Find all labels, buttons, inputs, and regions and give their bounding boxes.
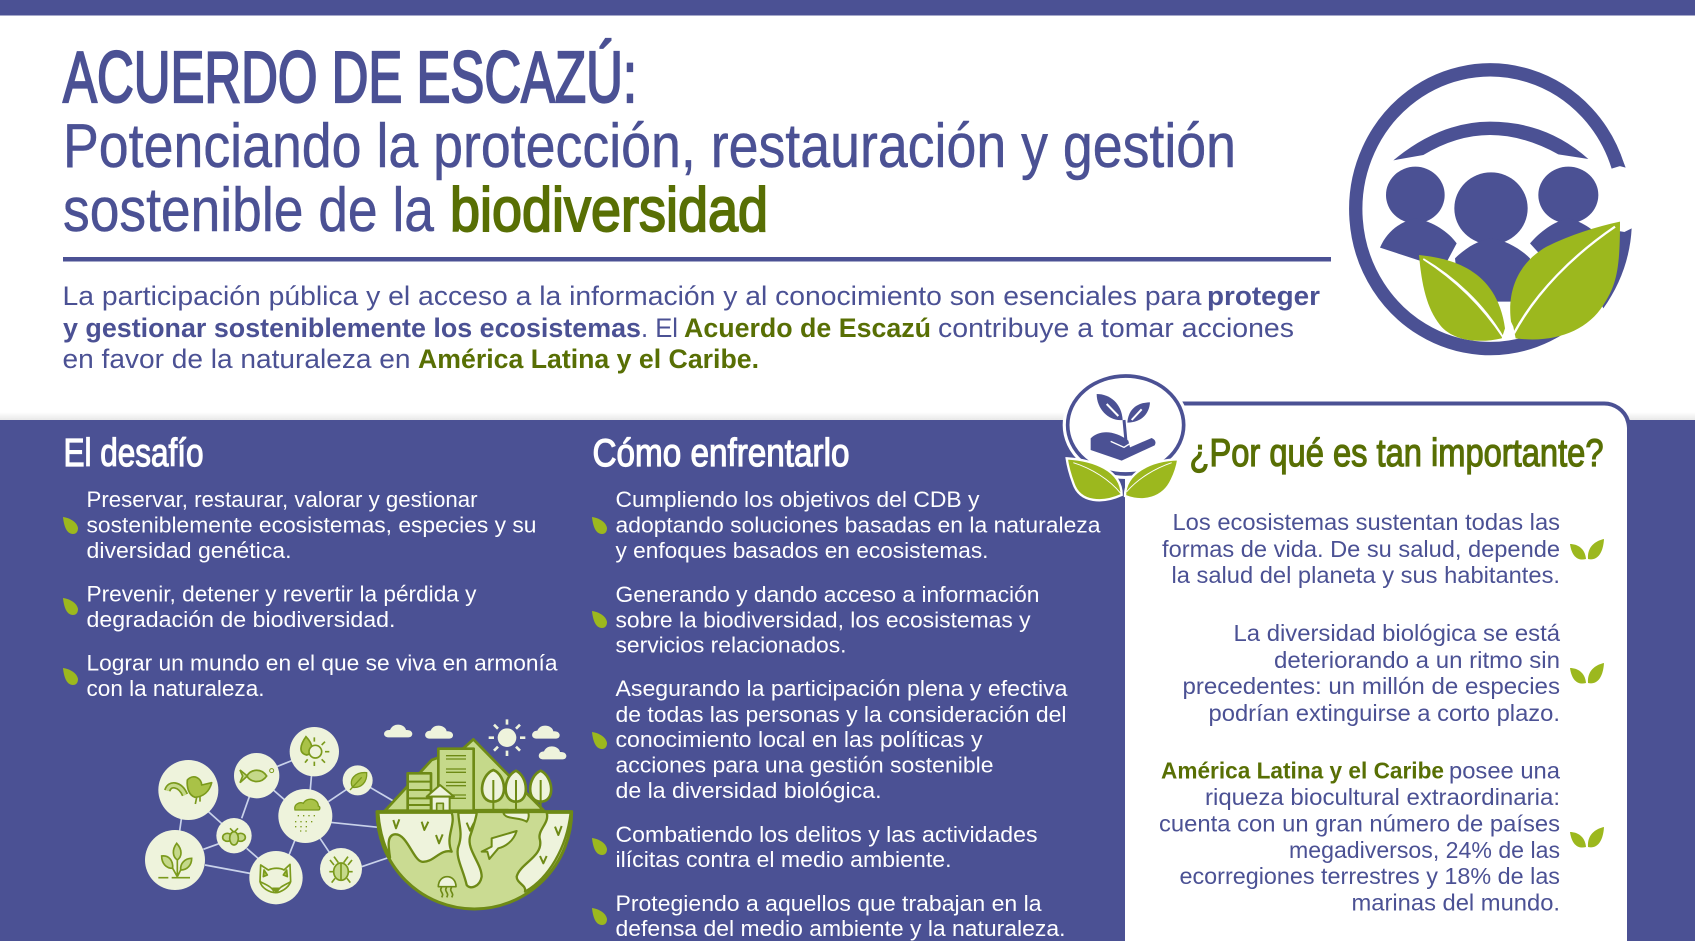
intro paragraph <box>62 281 1320 374</box>
list: cómo enfrentarlo items: Generando y dando acceso a información <box>616 582 1040 607</box>
list: desafío items: Prevenir, detener y revertir la pérdida y <box>86 582 476 606</box>
heading: El desafío: El desafío <box>64 432 204 475</box>
list: desafío items: diversidad genética. <box>86 538 292 563</box>
list: desafío items: sosteniblemente ecosistemas, especies y su <box>86 512 536 538</box>
icon: fox <box>260 864 291 893</box>
list: importance statements <box>1159 509 1604 916</box>
list: cómo enfrentarlo items: Cumpliendo los objetivos del CDB y <box>616 487 980 512</box>
title: Potenciando la protección, restauración y gestión <box>63 112 1236 181</box>
list: importance statements: deteriorando a un ritmo sin <box>1274 647 1560 673</box>
list: desafío items: con la naturaleza. <box>86 676 264 701</box>
list: cómo enfrentarlo items: Protegiendo a aquellos que trabajan en la <box>616 891 1042 916</box>
intro paragraph: La participación pública y el acceso a la información y al conocimiento son esenciales para <box>62 281 1203 311</box>
list: importance statements: megadiversos, 24% de las <box>1289 837 1560 863</box>
list: cómo enfrentarlo items: ilícitas contra el medio ambiente. <box>616 847 952 872</box>
panel: blue background <box>0 412 1695 941</box>
list: cómo enfrentarlo items: defensa del medio ambiente y la naturaleza. <box>616 916 1066 941</box>
intro paragraph: proteger <box>1207 281 1320 311</box>
list: cómo enfrentarlo items: Combatiendo los delitos y las actividades <box>616 822 1038 847</box>
list: cómo enfrentarlo items: de la diversidad biológica. <box>616 778 882 803</box>
icon: fish <box>240 769 274 783</box>
list: importance statements: ecorregiones terrestres y 18% de las <box>1180 863 1560 889</box>
list: cómo enfrentarlo items <box>592 487 1101 941</box>
list: importance statements: cuenta con un gran número de países <box>1159 810 1560 836</box>
list: importance statements: marinas del mundo. <box>1352 890 1560 916</box>
title <box>63 38 1236 245</box>
intro paragraph: contribuye a tomar acciones <box>938 313 1294 343</box>
list: cómo enfrentarlo items: Asegurando la participación plena y efectiva <box>616 676 1068 701</box>
illustration: biodiversity network and earth <box>145 719 572 909</box>
list: importance statements: precedentes: un millón de especies <box>1182 673 1560 699</box>
title: sostenible de la <box>63 176 434 245</box>
top bar <box>0 0 1695 16</box>
intro paragraph: en favor de la naturaleza en <box>62 344 410 374</box>
list: cómo enfrentarlo items: de todas las personas y la consideración del <box>616 702 1066 727</box>
intro paragraph: Acuerdo de Escazú <box>684 313 931 343</box>
intro paragraph: América Latina y el Caribe. <box>418 344 759 374</box>
icon: worm and bird <box>167 777 212 804</box>
illustration: earth with city and landscape <box>377 739 572 909</box>
list: importance statements: podrían extinguirse a corto plazo. <box>1208 700 1560 726</box>
icon: hand with sprout <box>1067 375 1185 500</box>
title: ACUERDO DE ESCAZÚ: <box>63 38 637 118</box>
list: importance statements: la salud del planeta y sus habitantes. <box>1172 562 1560 588</box>
list: desafío items: degradación de biodiversidad. <box>86 607 396 632</box>
sky: clouds and sun <box>384 719 566 759</box>
intro paragraph: . El <box>641 313 678 343</box>
list: cómo enfrentarlo items: acciones para una gestión sostenible <box>616 752 994 778</box>
list: importance statements: Los ecosistemas sustentan todas las <box>1172 509 1560 535</box>
icon: beetle <box>329 857 353 883</box>
list: cómo enfrentarlo items: y enfoques basados en ecosistemas. <box>616 538 988 563</box>
icon: bee <box>223 828 245 845</box>
list: desafío items: Preservar, restaurar, valorar y gestionar <box>86 487 477 512</box>
icon: leaf <box>350 773 367 790</box>
heading: Cómo enfrentarlo: Cómo enfrentarlo <box>592 432 850 475</box>
list: cómo enfrentarlo items: sobre la biodiversidad, los ecosistemas y <box>616 608 1030 632</box>
heading: Por qué es tan importante: ¿Por qué es tan importante? <box>1190 432 1604 475</box>
icon: people and leaves logo <box>1356 70 1632 349</box>
list: importance statements: riqueza biocultural extraordinaria: <box>1205 784 1560 810</box>
list: cómo enfrentarlo items: adoptando soluciones basadas en la naturaleza <box>616 512 1101 538</box>
icon: rain cloud <box>295 799 320 831</box>
list: importance statements: posee una <box>1449 758 1560 784</box>
panel: why it matters card <box>1125 403 1628 941</box>
list: desafío items: Lograr un mundo en el que se viva en armonía <box>86 650 558 676</box>
icon: plant <box>158 843 192 878</box>
intro paragraph: y gestionar sosteniblemente los ecosistemas <box>63 313 641 343</box>
title: biodiversidad <box>450 176 768 245</box>
list: desafío items <box>63 487 558 701</box>
list: importance statements: La diversidad biológica se está <box>1234 620 1560 646</box>
list: cómo enfrentarlo items: servicios relacionados. <box>616 632 846 658</box>
list: importance statements: formas de vida. De su salud, depende <box>1162 536 1560 562</box>
list: importance statements: América Latina y el Caribe <box>1161 758 1444 784</box>
list: cómo enfrentarlo items: conocimiento local en las políticas y <box>616 727 982 752</box>
icon: water drop and sun <box>301 737 329 766</box>
